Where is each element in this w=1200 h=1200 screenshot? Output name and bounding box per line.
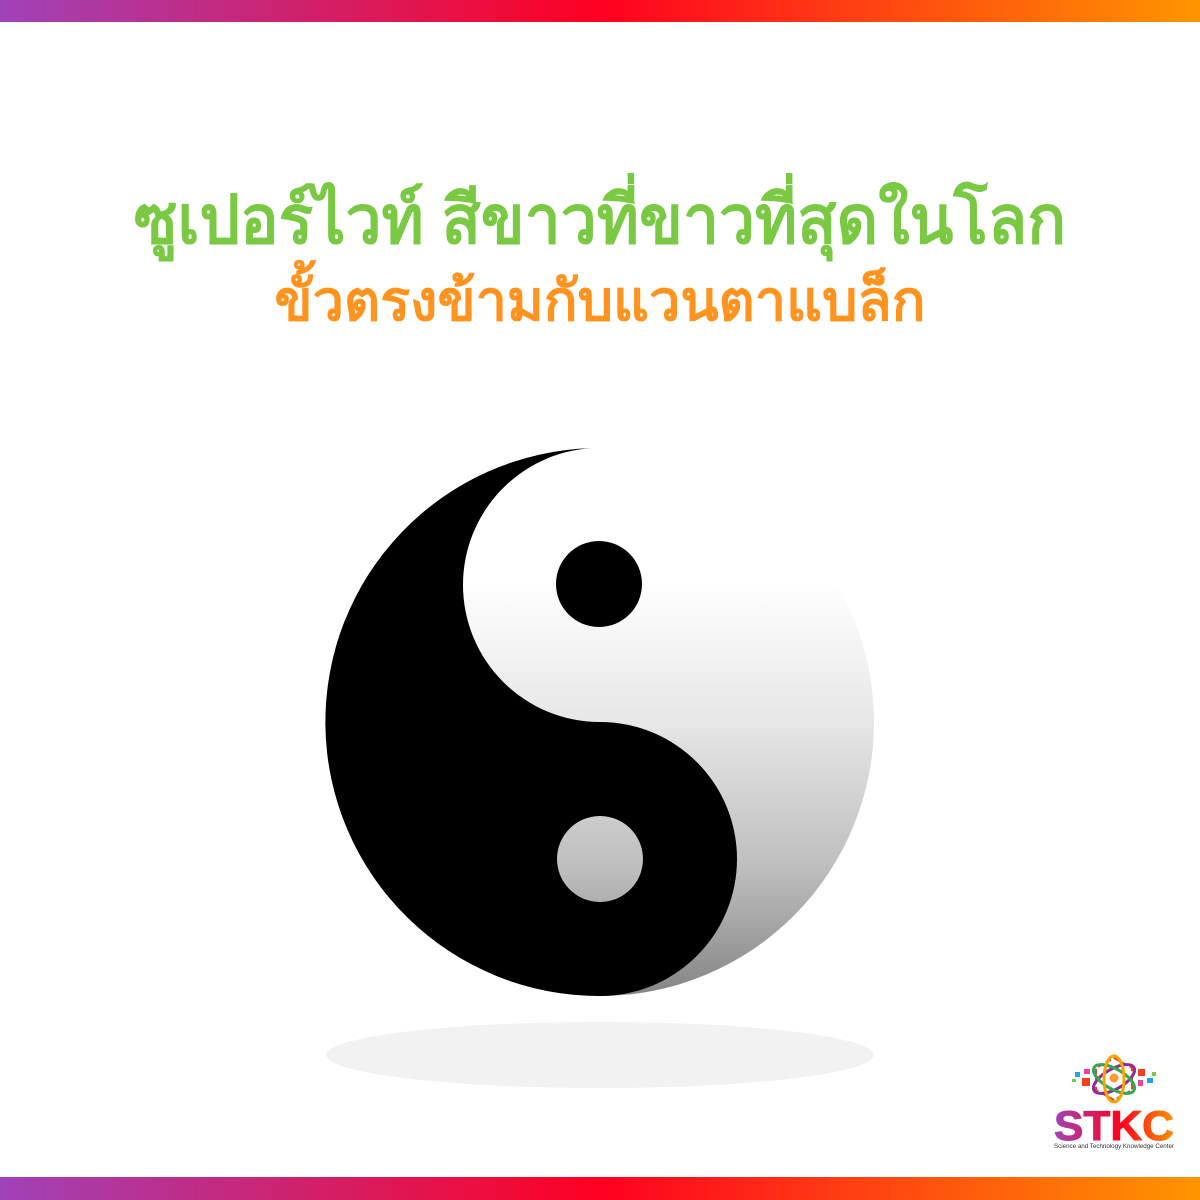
- grey dot: [557, 816, 643, 902]
- black dot: [556, 541, 642, 627]
- STKC logo: [1054, 1056, 1174, 1150]
- title: ซูเปอร์ไวท์ สีขาวที่ขาวที่สุดในโลก: [134, 183, 1066, 258]
- ground shadow: [326, 1022, 874, 1088]
- top gradient bar: [0, 0, 1200, 22]
- subtitle: ขั้วตรงข้ามกับแวนตาแบล็ก: [274, 269, 926, 332]
- logo pixels: [1072, 1069, 1156, 1086]
- white half with gradient: [326, 448, 874, 996]
- logo tagline: Science and Technology Knowledge Center: [1054, 1144, 1174, 1150]
- bottom gradient bar: [0, 1177, 1200, 1200]
- black half: [325, 448, 737, 996]
- logo wordmark: STKC: [1054, 1102, 1174, 1149]
- logo atom icon: [1089, 1056, 1139, 1102]
